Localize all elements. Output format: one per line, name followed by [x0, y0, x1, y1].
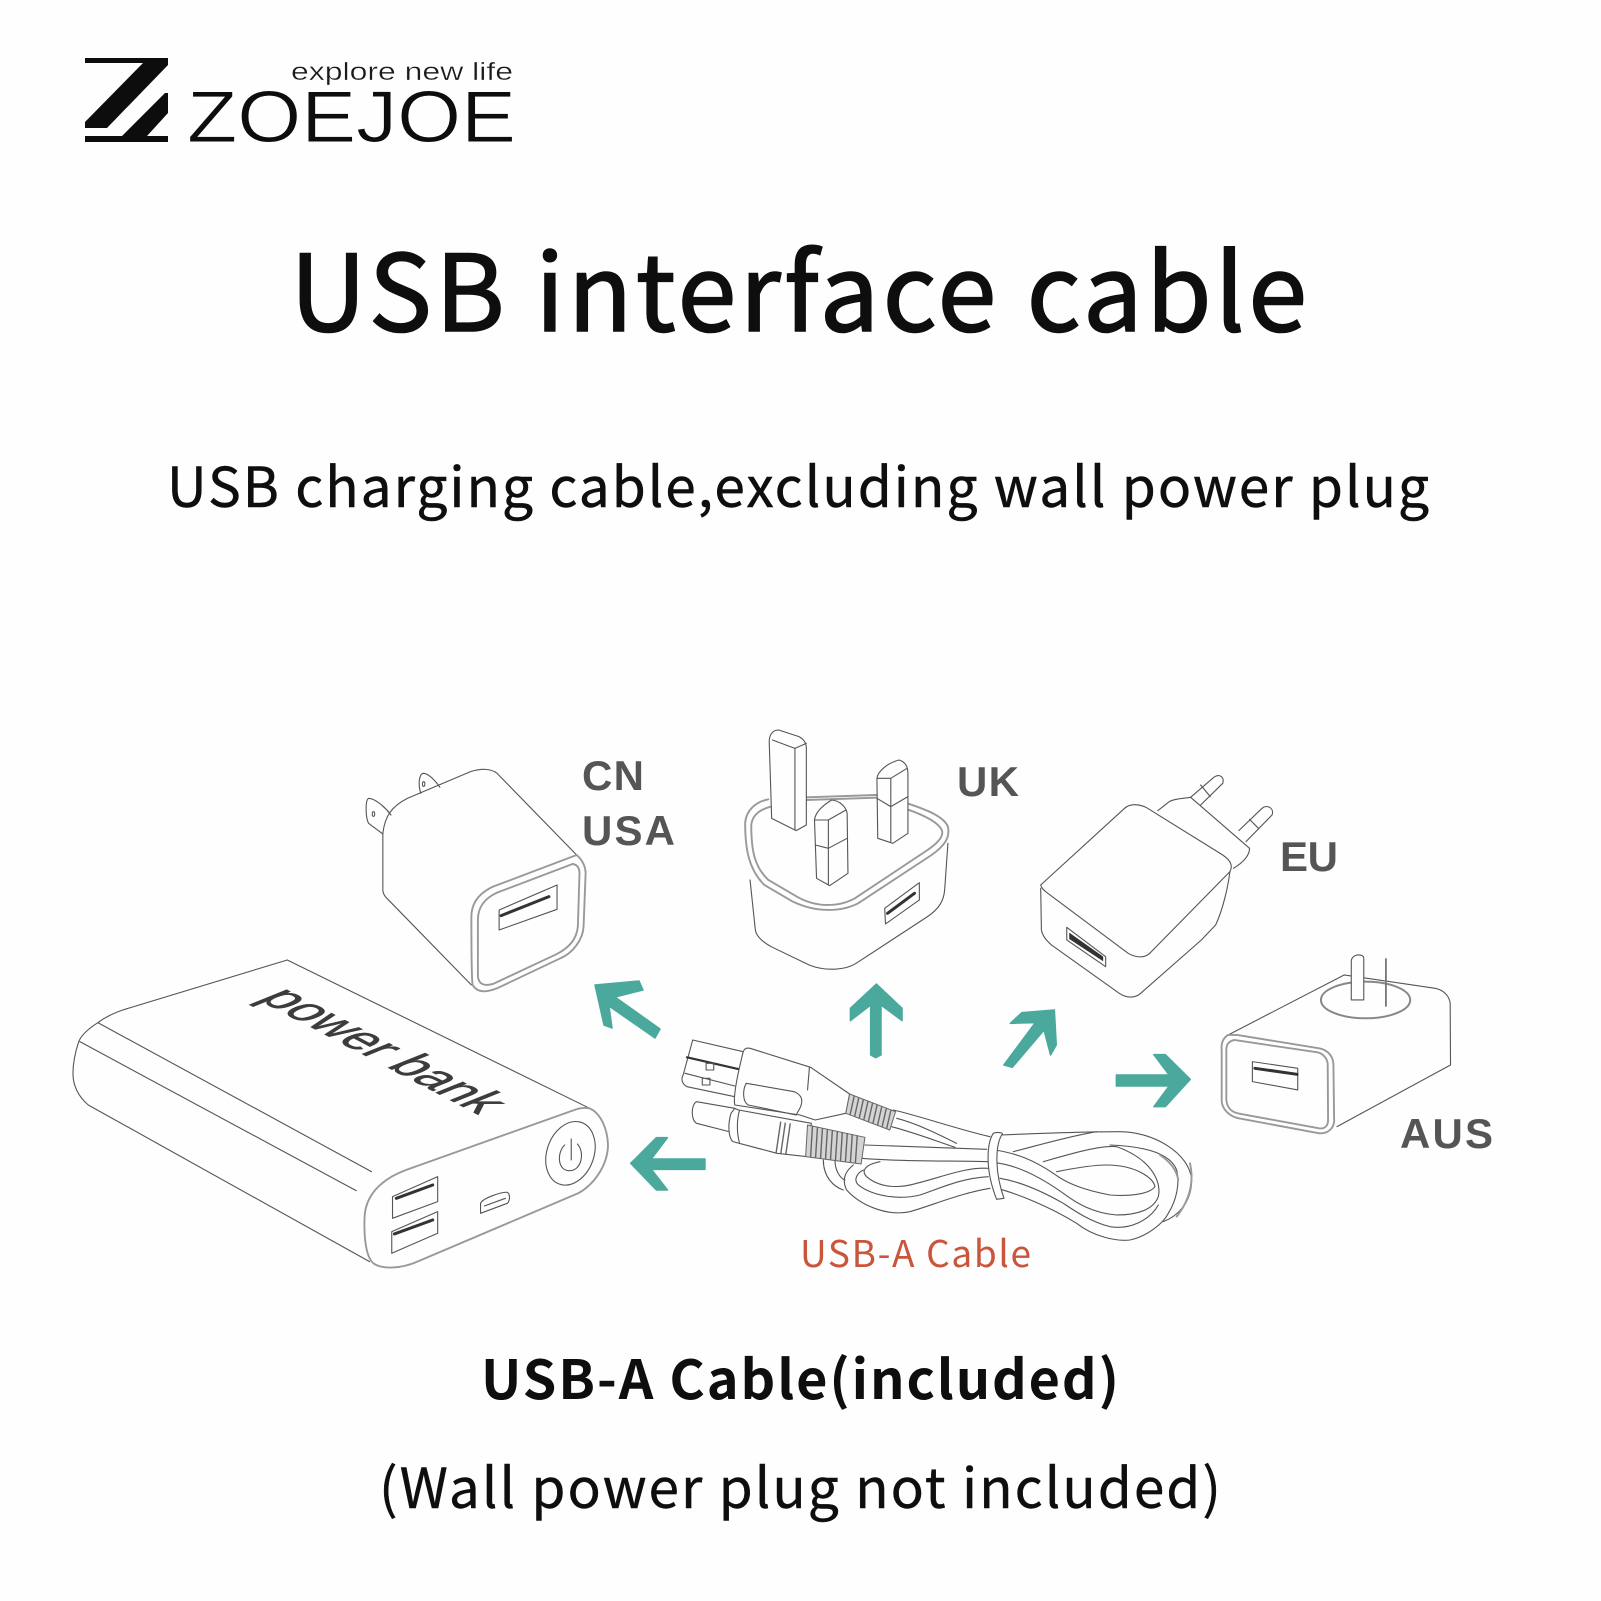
title: USB interface cable	[290, 208, 1307, 362]
logo mark	[85, 58, 168, 142]
arrow: to UK adapter	[850, 984, 902, 1058]
caption: wall plug not included: (Wall power plug not included)	[379, 1444, 1221, 1524]
label: AUS: AUS	[1400, 1110, 1493, 1157]
arrow: to AUS adapter	[1116, 1055, 1190, 1107]
label: EU: EU	[1280, 833, 1338, 880]
arrow: to power bank	[631, 1138, 705, 1190]
USB-A cable	[682, 1040, 1192, 1240]
logo: ZOEJOE	[85, 58, 516, 158]
label: USB-A Cable: USB-A Cable	[800, 1224, 1031, 1278]
EU adapter	[1041, 776, 1273, 997]
logo tagline: explore new life	[291, 58, 513, 86]
arrow: to CN/USA adapter	[595, 981, 660, 1038]
label: CN: CN	[582, 752, 644, 799]
subtitle: USB charging cable,excluding wall power plug	[167, 443, 1429, 523]
CN/USA adapter	[366, 769, 586, 991]
barrel plug	[692, 1102, 865, 1164]
UK adapter	[745, 730, 948, 969]
logo wordmark: ZOEJOE	[187, 77, 516, 158]
label: UK: UK	[957, 758, 1019, 805]
AUS adapter	[1222, 955, 1451, 1133]
label: USA: USA	[582, 807, 675, 854]
USB-A plug	[682, 1040, 896, 1130]
caption: cable included: USB-A Cable(included)	[481, 1336, 1119, 1415]
arrow: to EU adapter	[1004, 1010, 1056, 1067]
power bank	[73, 960, 608, 1268]
power bank label: power bank	[246, 980, 525, 1119]
cable loops	[823, 1110, 1192, 1240]
